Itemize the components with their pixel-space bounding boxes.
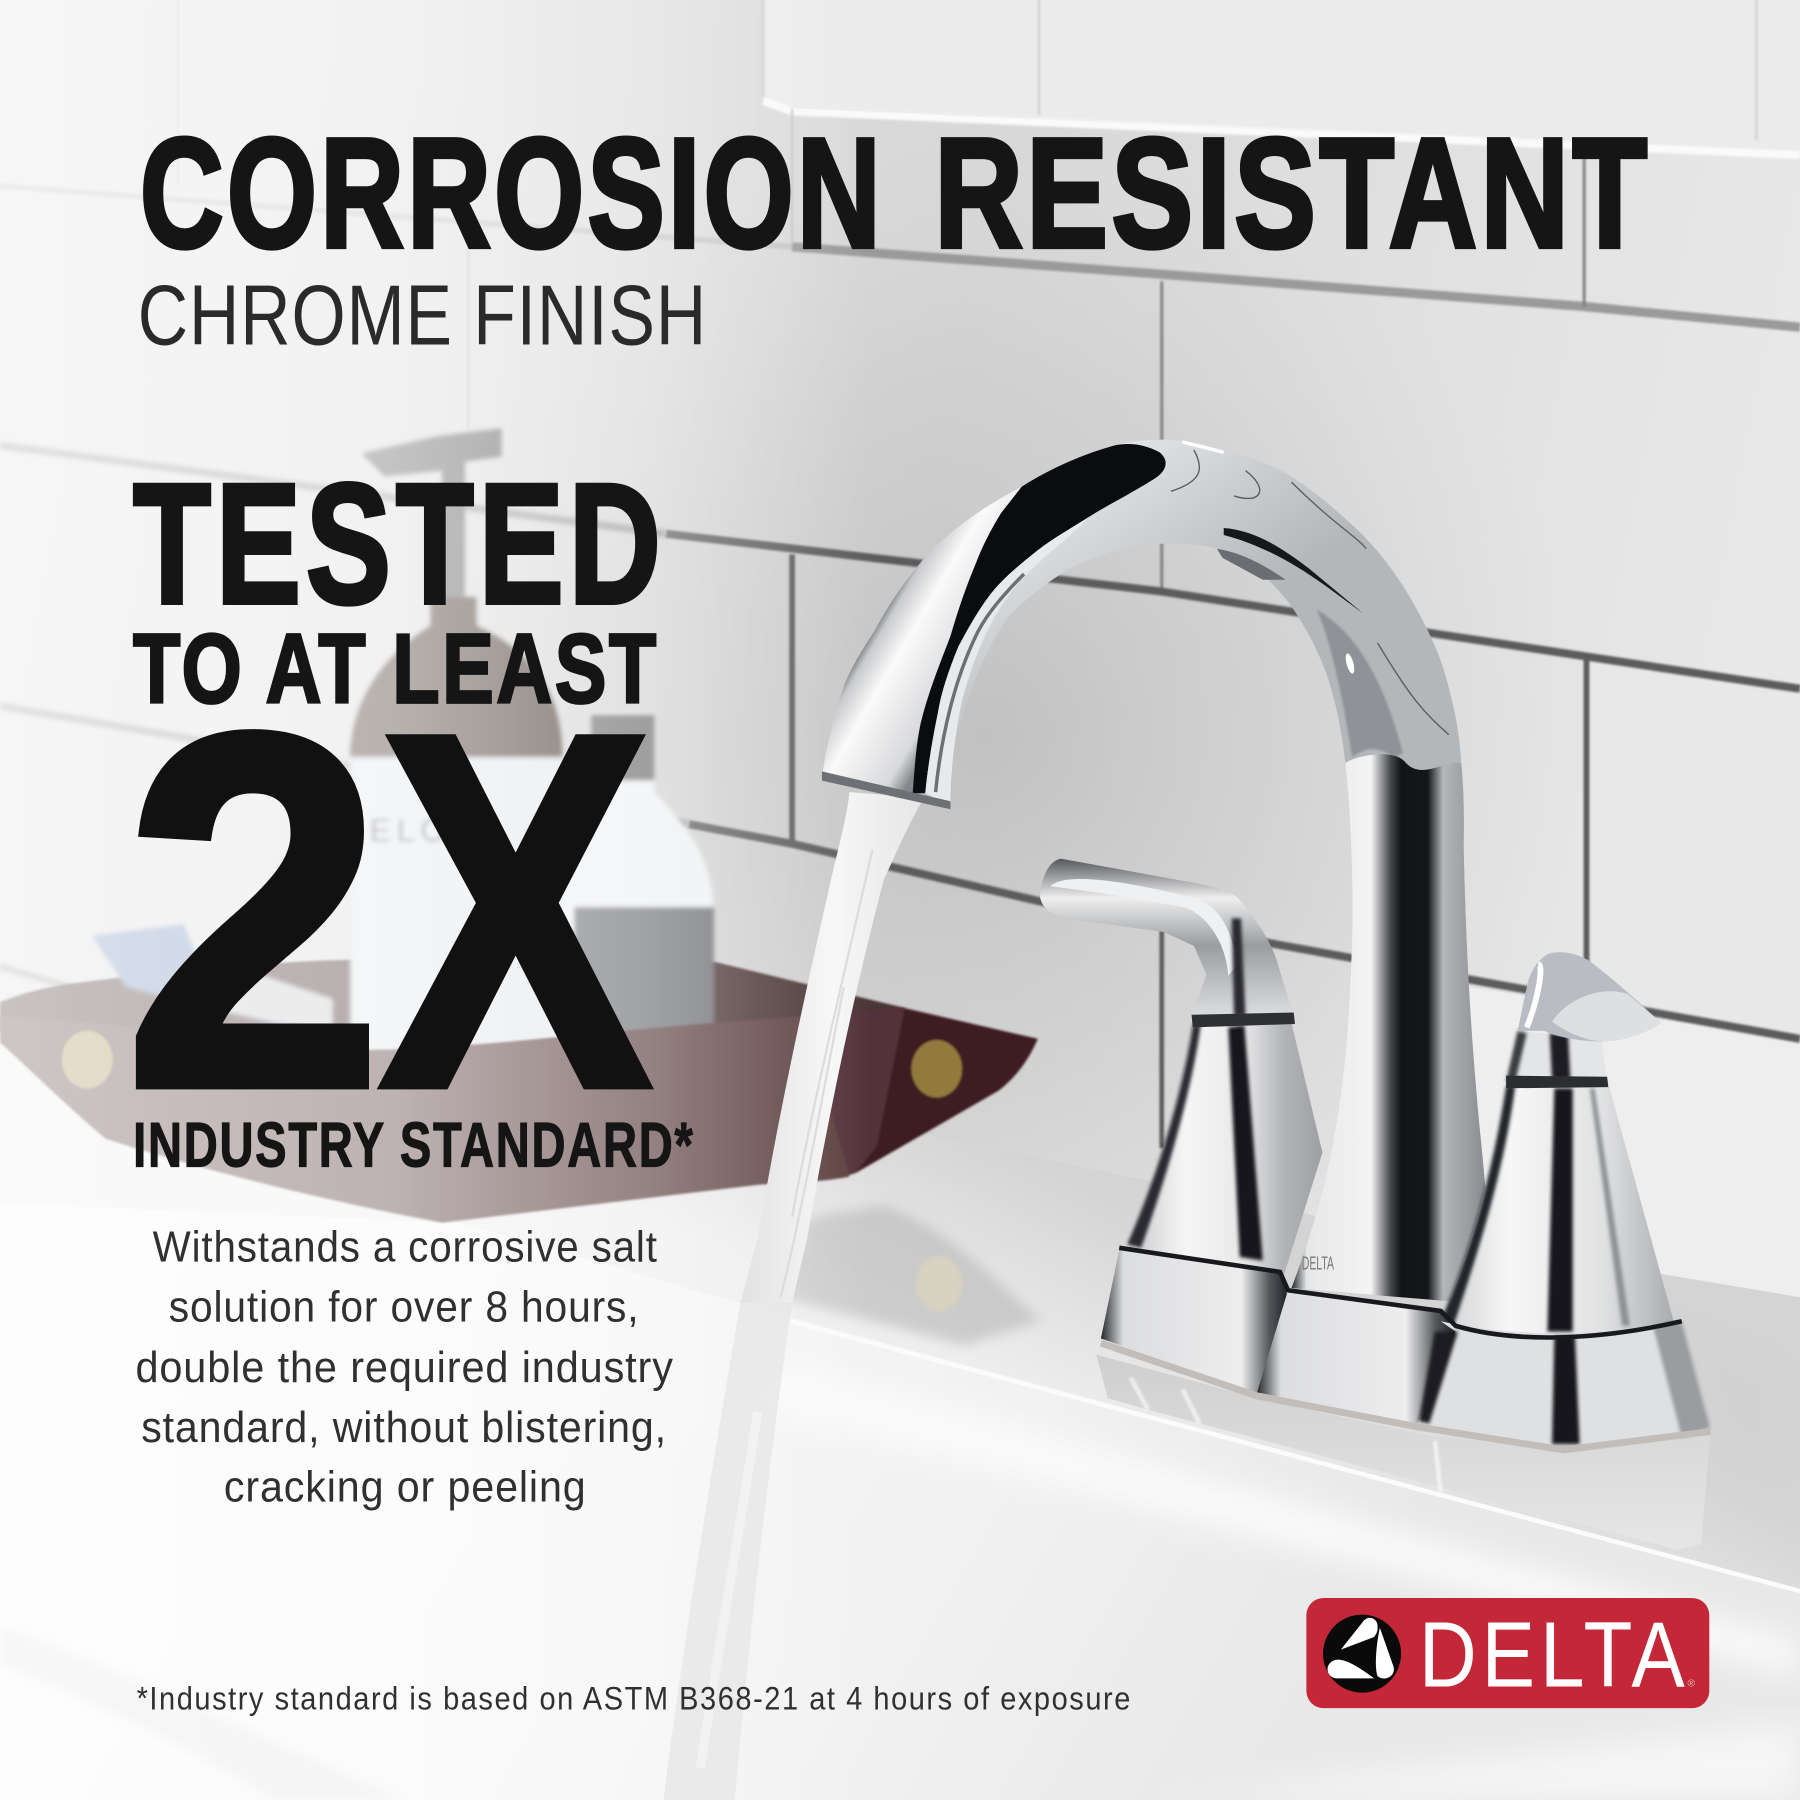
riser column — [1291, 754, 1488, 1303]
lower stream over basin — [664, 1303, 792, 1800]
water stream — [664, 792, 924, 1800]
gooseneck spout and riser — [822, 440, 1488, 1303]
body description: double the required industry — [135, 1344, 674, 1392]
body description: solution for over 8 hours, — [169, 1283, 639, 1331]
title: corrosion resistant: CORROSION — [140, 107, 884, 281]
faucet base plate — [1101, 1248, 1710, 1450]
title: corrosion resistant — [140, 107, 1651, 281]
footnote: *Industry standard is based on ASTM B368-21 at 4 hours of exposure — [137, 1680, 1132, 1716]
left handle — [1040, 859, 1322, 1277]
headline: to at least: TO AT LEAST — [133, 614, 659, 724]
bright left spout — [822, 487, 1022, 793]
counter top and sink basin — [0, 1033, 1800, 1800]
big stat: 2X: 2 — [124, 630, 383, 1192]
logo: Delta: DELTA — [1419, 1602, 1690, 1706]
body description — [135, 1224, 674, 1512]
leather tray: front panel — [0, 1008, 1038, 1223]
icon: Delta tri-drop mark — [1323, 1615, 1401, 1693]
faucet base plate: DELTA — [1302, 1253, 1334, 1274]
soap bottles and razor: ELO — [370, 812, 451, 848]
soap bottles and razor — [92, 428, 714, 1062]
body description: cracking or peeling — [224, 1464, 587, 1512]
logo: Delta — [1306, 1598, 1709, 1708]
body description: Withstands a corrosive salt — [153, 1224, 658, 1272]
faucet reflection on counter — [1096, 1355, 1710, 1550]
right handle — [1441, 952, 1674, 1333]
black reflection — [913, 444, 1166, 793]
soft white fade overlay on left — [0, 0, 872, 1800]
dark crescent on arch — [1224, 528, 1363, 613]
spout outlet rim — [822, 771, 951, 809]
big stat: 2X — [124, 630, 653, 1192]
upper stream — [740, 792, 924, 1303]
big stat: 2X: X — [380, 630, 653, 1192]
headline: tested: TESTED — [133, 449, 666, 640]
leather tray: back panel — [0, 960, 907, 1068]
thin arch contour lines — [1171, 450, 1449, 735]
body description: standard, without blistering, — [141, 1404, 667, 1452]
subtitle: chrome finish: CHROME FINISH — [138, 267, 707, 362]
inner bright band — [925, 517, 1089, 806]
faucet — [822, 440, 1710, 1550]
subheading: industry standard: INDUSTRY STANDARD* — [133, 1110, 695, 1180]
logo: Delta: ® — [1688, 1678, 1696, 1689]
shaded riser patch — [1317, 610, 1403, 758]
